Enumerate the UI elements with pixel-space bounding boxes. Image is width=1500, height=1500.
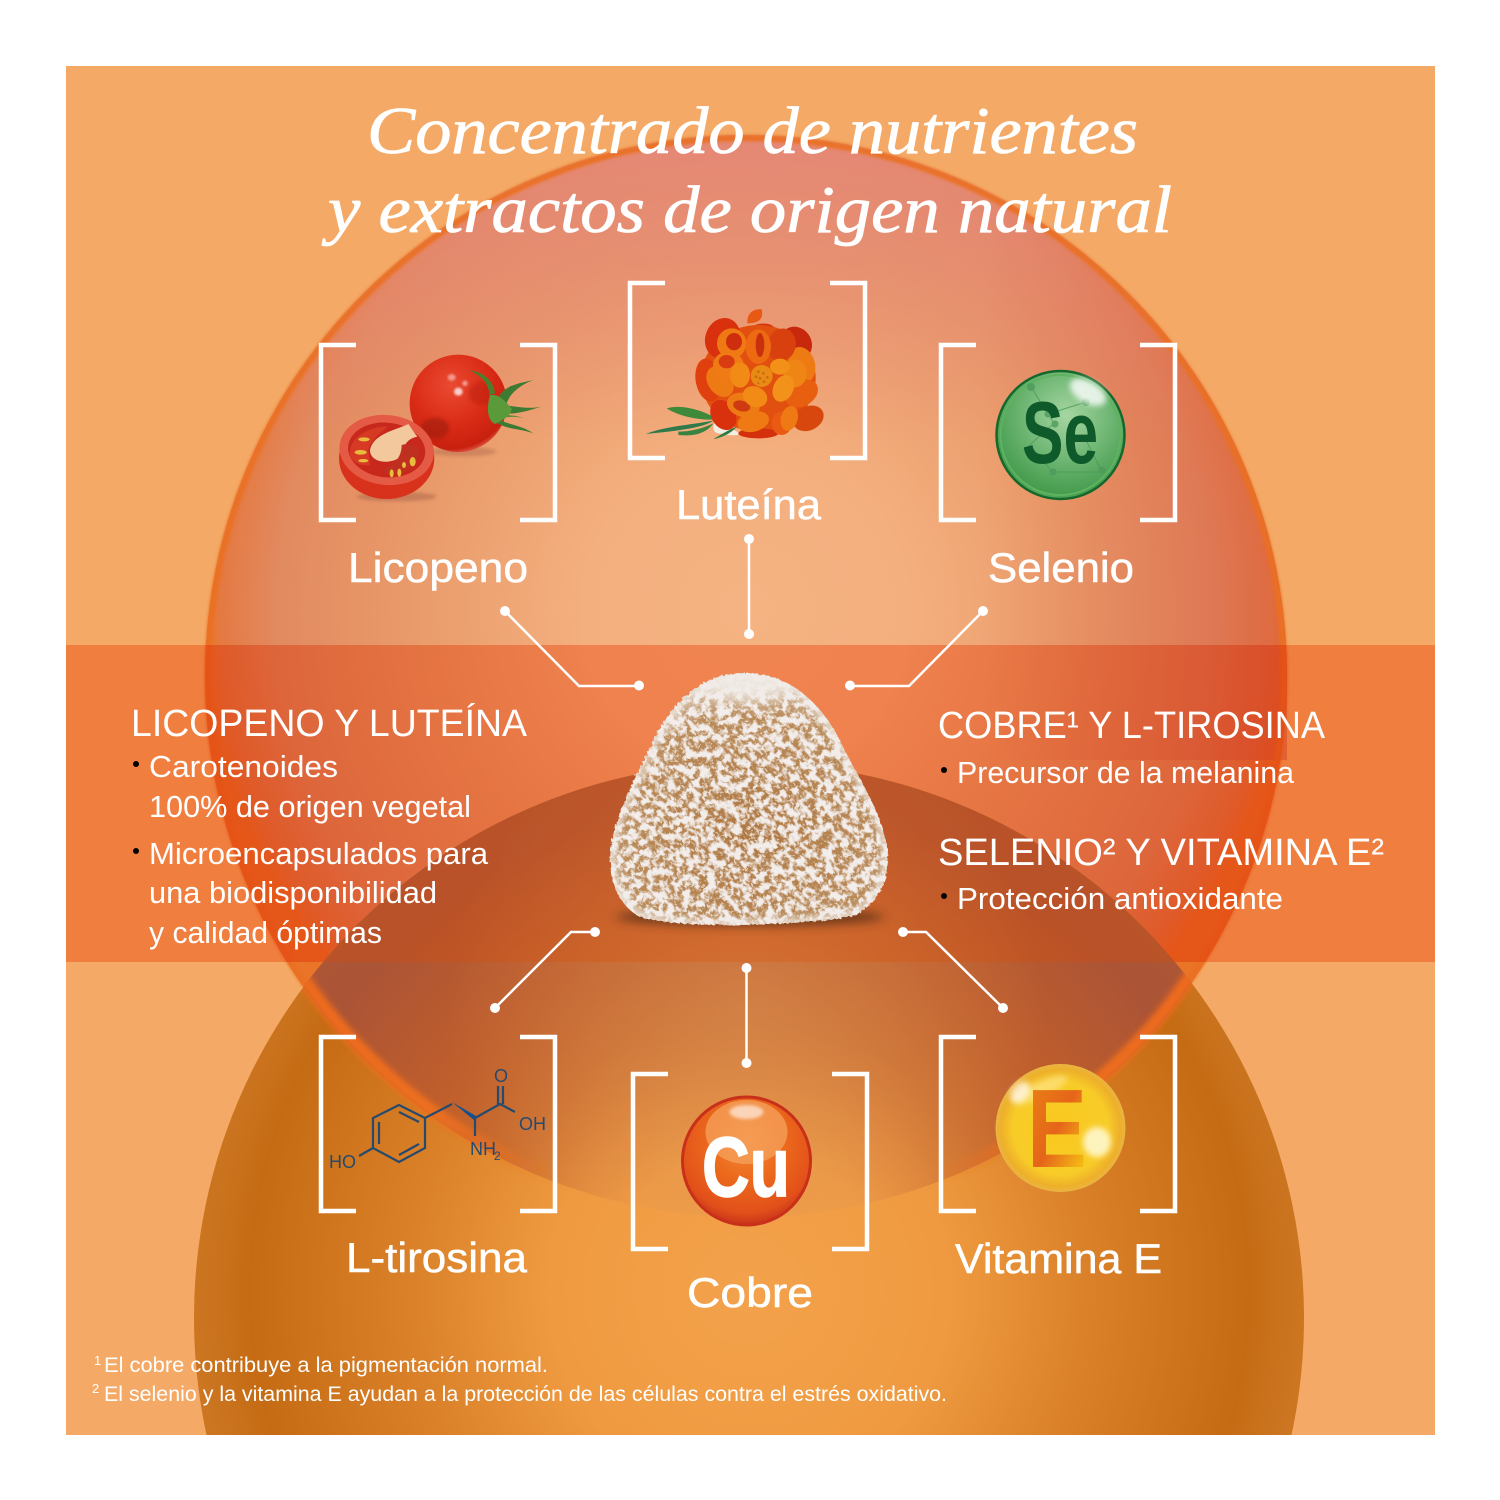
title: y extractos de origen natural — [321, 173, 1172, 247]
text block: licopeno y luteina: LICOPENO Y LUTEÍNA — [131, 702, 528, 745]
bracket frame: l-tirosina — [321, 1037, 555, 1211]
text block: licopeno y luteina: Carotenoides — [149, 749, 338, 784]
icon: marigold flower — [646, 309, 828, 439]
icon: tyrosine molecule: NH — [470, 1139, 496, 1159]
bracket frame: vitamina e — [941, 1037, 1175, 1211]
icon: vitamin E capsule: E — [1027, 1067, 1087, 1191]
ingredient: luteina — [630, 283, 865, 528]
label: cobre: Cobre — [687, 1269, 813, 1316]
footnotes: El selenio y la vitamina E ayudan a la protección de las células contra el estrés oxidativo. — [104, 1383, 947, 1406]
icon: copper sphere: Cu — [702, 1120, 790, 1214]
text block: licopeno y luteina: una biodisponibilidad — [149, 875, 437, 910]
footnotes: El cobre contribuye a la pigmentación normal. — [104, 1354, 548, 1377]
footnotes: 2 — [92, 1381, 99, 1396]
icon: vitamin E capsule — [996, 1064, 1126, 1192]
bracket frame: licopeno — [321, 345, 555, 520]
ingredient: vitamina e — [941, 1037, 1175, 1282]
text block: cobre y selenio: SELENIO² Y VITAMINA E² — [938, 832, 1384, 874]
ingredient: l-tirosina — [321, 1037, 555, 1281]
bracket frame: selenio — [941, 345, 1175, 520]
footnotes — [92, 1353, 947, 1406]
label: l-tirosina: L-tirosina — [346, 1234, 528, 1281]
text block: cobre y selenio — [938, 705, 1384, 916]
icon: tyrosine molecule: 2 — [494, 1149, 501, 1163]
title — [321, 94, 1172, 247]
icon: selenium sphere — [996, 371, 1124, 499]
label: luteina: Luteína — [676, 481, 822, 528]
text block: cobre y selenio: Protección antioxidante — [957, 881, 1283, 916]
upper circle — [205, 135, 1287, 1217]
icon: tomatoes — [336, 355, 542, 501]
bracket frame: cobre — [633, 1074, 867, 1249]
icon: tyrosine molecule: O — [494, 1066, 508, 1086]
gummy shadow — [616, 908, 884, 926]
footnotes: 1 — [94, 1353, 101, 1368]
label: vitamina e: Vitamina E — [955, 1235, 1162, 1282]
icon: tyrosine molecule: OH — [519, 1114, 546, 1134]
icon: copper sphere — [682, 1097, 810, 1225]
label: selenio: Selenio — [988, 544, 1134, 591]
label: licopeno: Licopeno — [348, 544, 528, 591]
text block: cobre y selenio: COBRE¹ Y L-TIROSINA — [938, 705, 1326, 747]
text block: licopeno y luteina: 100% de origen vegetal — [149, 789, 471, 824]
text block: licopeno y luteina: Microencapsulados para — [149, 836, 489, 871]
connectors: bottom — [490, 927, 1008, 1068]
central band — [66, 645, 1435, 962]
text block: cobre y selenio: Precursor de la melanina — [957, 755, 1295, 790]
text block: licopeno y luteina — [131, 702, 528, 950]
text block: licopeno y luteina: y calidad óptimas — [149, 915, 382, 950]
lower circle — [194, 774, 1304, 1435]
icon: tyrosine molecule — [329, 1066, 546, 1172]
gummy — [609, 672, 888, 932]
connectors: top — [500, 534, 988, 690]
icon: tyrosine molecule: HO — [329, 1152, 356, 1172]
ingredient: licopeno — [321, 345, 555, 591]
ingredient: cobre — [633, 1074, 867, 1316]
bracket frame: luteina — [630, 283, 865, 458]
title: Concentrado de nutrientes — [367, 94, 1138, 168]
icon: selenium sphere: Se — [1022, 383, 1098, 482]
ingredient: selenio — [941, 345, 1175, 591]
